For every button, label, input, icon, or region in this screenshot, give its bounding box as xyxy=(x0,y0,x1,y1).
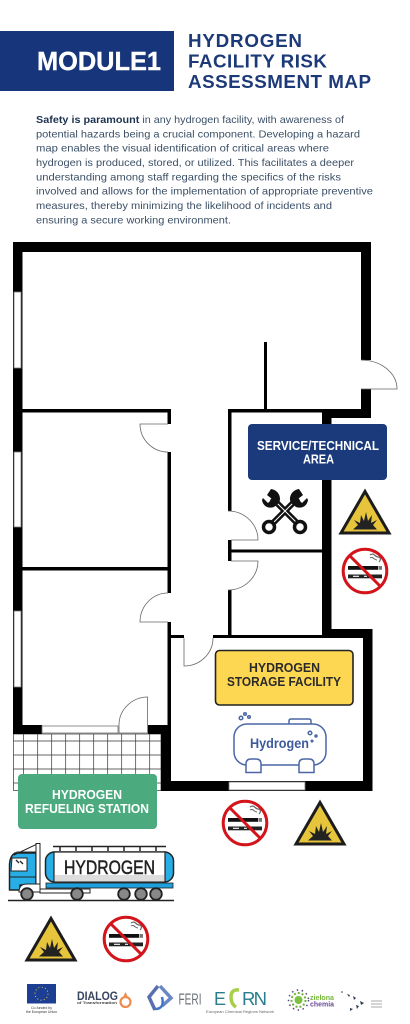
icon: hydrogen tank xyxy=(234,713,326,772)
icon: hydrogen tank: Hydrogen xyxy=(250,735,309,751)
intro paragraph: involved and allows for the implementation of appropriate preventive xyxy=(36,187,373,198)
intro paragraph: measures, thereby minimizing the likelihood of incidents and xyxy=(36,201,332,212)
icon: no smoking, refueling xyxy=(103,916,149,962)
interior thin walls xyxy=(22,342,323,727)
logo: ECRN xyxy=(206,988,274,1014)
intro paragraph: Safety is paramount in any hydrogen facility, with awareness of xyxy=(36,115,344,126)
logo: Dialog of Transformation xyxy=(77,989,130,1007)
label: hydrogen storage facility: STORAGE FACILITY xyxy=(227,674,341,689)
icon: hydrogen tanker truck: HYDROGEN xyxy=(64,857,155,879)
logo: zielona chemia: zielona xyxy=(310,995,334,1002)
title: HYDROGEN xyxy=(188,30,302,51)
header banner: MODULE1 xyxy=(0,31,174,91)
icon: no smoking, storage xyxy=(222,800,268,846)
label: hydrogen refueling station: HYDROGEN xyxy=(52,787,122,802)
label: hydrogen refueling station xyxy=(18,774,157,829)
title: FACILITY RISK xyxy=(188,50,327,72)
intro paragraph: potential hazards being a crucial component. Developing a hazard xyxy=(36,129,360,140)
intro paragraph xyxy=(36,115,373,226)
title: ASSESSMENT MAP xyxy=(188,71,371,92)
label: service/technical area xyxy=(248,424,387,480)
intro paragraph: understanding among staff regarding the specifics of the risks xyxy=(36,172,341,183)
outer and thick walls xyxy=(13,242,372,791)
icon: explosive warning triangle, service area xyxy=(341,492,389,533)
label: service/technical area: AREA xyxy=(303,452,334,466)
label: service/technical area: SERVICE/TECHNICAL xyxy=(257,438,379,453)
logo: EU co-funding: Co-funded by xyxy=(31,1006,52,1010)
label: hydrogen storage facility: HYDROGEN xyxy=(249,660,320,675)
icon: no smoking, service area xyxy=(342,548,388,594)
intro paragraph: hydrogen is produced, stored, or utilized. This facilitates a deeper xyxy=(36,158,355,169)
logo: EU co-funding: the European Union xyxy=(26,1010,57,1014)
logo: birds emblem xyxy=(341,991,382,1011)
logo: EU co-funding xyxy=(26,984,57,1014)
logo: ECRN: E xyxy=(214,988,226,1009)
logo: ECRN: European Chemical Regions Network xyxy=(206,1010,274,1014)
windows xyxy=(14,292,305,790)
tiled refueling forecourt xyxy=(14,734,161,790)
label: hydrogen refueling station: REFUELING STATION xyxy=(25,801,149,816)
icon: explosive warning triangle, storage xyxy=(296,802,344,844)
label: hydrogen storage facility xyxy=(216,650,353,705)
icon: hydrogen tanker truck xyxy=(8,844,174,900)
floor plan xyxy=(13,242,397,791)
icon: crossed wrenches xyxy=(262,489,308,532)
icon: explosive warning triangle, refueling xyxy=(27,918,75,960)
logo: FERI: FERI xyxy=(178,992,202,1008)
intro paragraph: map enables the visual identification of critical areas where xyxy=(36,144,329,155)
logo: Dialog of Transformation: DIALOG xyxy=(77,989,118,1003)
logo: zielona chemia xyxy=(288,990,334,1010)
header banner: MODULE1: MODULE1 xyxy=(37,46,161,76)
logo: ECRN: RN xyxy=(242,988,267,1009)
intro paragraph: ensuring a secure working environment. xyxy=(36,215,231,226)
logo: FERI xyxy=(149,986,202,1010)
logo: Dialog of Transformation: of Transformation xyxy=(77,1000,118,1005)
logo: zielona chemia: chemia xyxy=(310,1002,334,1008)
title xyxy=(188,30,371,92)
doors xyxy=(119,360,397,733)
